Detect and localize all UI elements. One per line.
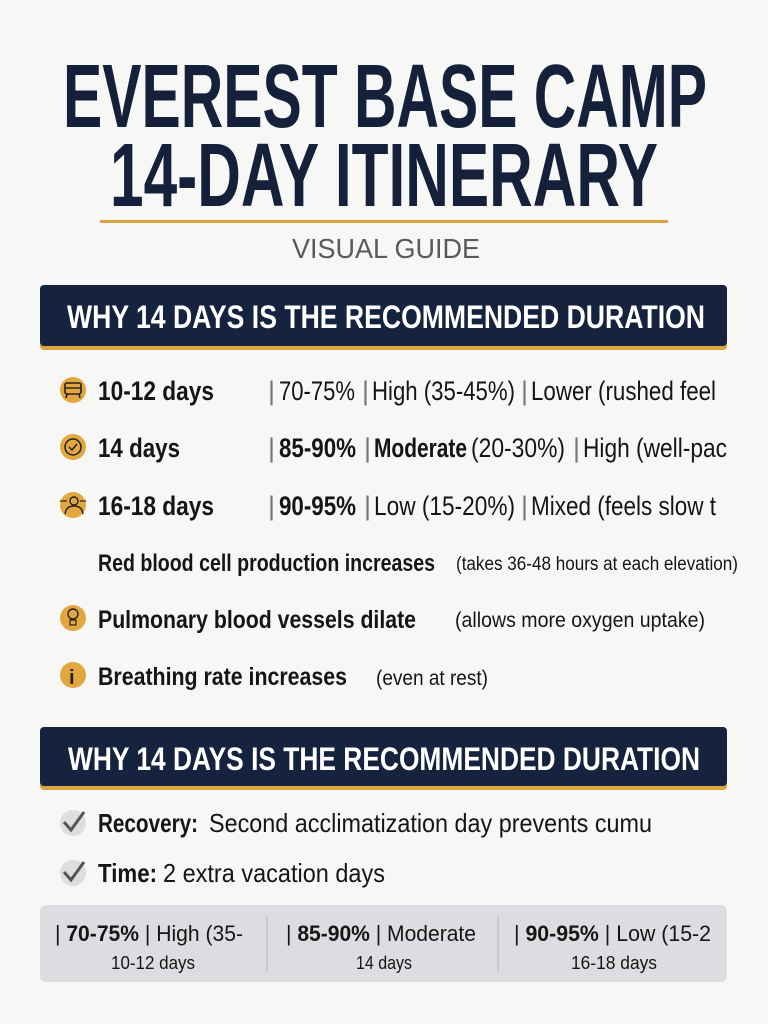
text: pulmonary: Pulmonary blood vessels dilate: [98, 606, 416, 634]
comparison strip: [40, 905, 727, 982]
icon: bus: [60, 377, 86, 403]
text: red blood cell: Red blood cell production increases: [98, 550, 435, 577]
text: pulmonary: (allows more oxygen uptake): [455, 609, 705, 632]
row: 10-12 days: |: [268, 376, 275, 406]
row: 16-18 days: |: [521, 491, 528, 521]
column: 16-18 days: 16-18 days: [571, 953, 657, 973]
column: 14 days: | 85-90% | Moderate: [286, 921, 476, 946]
row: 14 days: 85-90%: [279, 433, 356, 463]
column: 14 days: [286, 921, 476, 973]
row: 14 days: 14 days: [98, 433, 180, 463]
row: 14 days: High (well-pac: [583, 433, 727, 463]
icon: info: i: [69, 667, 75, 689]
row: 16-18 days: Low (15-20%): [374, 491, 515, 521]
text: breathing: [60, 662, 488, 691]
row: 14 days: [60, 433, 727, 463]
check item: recovery: [60, 808, 652, 838]
row: 16-18 days: Mixed (feels slow t: [531, 491, 716, 521]
column: 16-18 days: [514, 921, 711, 973]
check item: time: [60, 858, 385, 888]
subtitle: VISUAL GUIDE: [292, 233, 480, 264]
column: 14 days: 14 days: [356, 953, 412, 973]
icon: bulb: [60, 605, 86, 631]
text: red blood cell: (takes 36-48 hours at each elevation): [456, 554, 738, 575]
icon: info: [60, 662, 86, 689]
row: 10-12 days: [60, 376, 716, 406]
row: 10-12 days: |: [521, 376, 528, 406]
row: 14 days: (20-30%): [471, 433, 565, 463]
row: 16-18 days: [60, 491, 716, 521]
icon: person: [60, 492, 86, 518]
row: 14 days: |: [573, 433, 580, 463]
row: 16-18 days: |: [268, 491, 275, 521]
column: 10-12 days: 10-12 days: [111, 953, 195, 973]
title: [63, 47, 707, 226]
icon: check circle: [60, 434, 86, 460]
banner 2: [40, 727, 727, 790]
row: 10-12 days: |: [362, 376, 369, 406]
text: pulmonary: [60, 605, 705, 634]
banner 1: [40, 285, 727, 350]
check item: recovery: Recovery:: [98, 808, 198, 838]
row: 10-12 days: 70-75%: [279, 376, 355, 406]
row: 16-18 days: 90-95%: [279, 491, 356, 521]
column: 16-18 days: | 90-95% | Low (15-2: [514, 921, 711, 946]
text: breathing: Breathing rate increases: [98, 663, 347, 691]
row: 14 days: Moderate: [374, 433, 467, 463]
row: 16-18 days: 16-18 days: [98, 491, 214, 521]
row: 14 days: |: [268, 433, 275, 463]
column: 10-12 days: | 70-75% | High (35-: [55, 921, 243, 946]
row: 10-12 days: High (35-45%): [372, 376, 515, 406]
check item: time: Time:: [98, 858, 157, 888]
text: breathing: (even at rest): [376, 667, 488, 690]
row: 10-12 days: 10-12 days: [98, 376, 214, 406]
row: 16-18 days: |: [364, 491, 371, 521]
column: 10-12 days: [55, 921, 243, 973]
check item: recovery: Second acclimatization day prevents cumu: [209, 808, 652, 838]
row: 10-12 days: Lower (rushed feel: [531, 376, 716, 406]
text: red blood cell: [98, 550, 738, 577]
row: 14 days: |: [364, 433, 371, 463]
check item: time: 2 extra vacation days: [163, 858, 385, 888]
